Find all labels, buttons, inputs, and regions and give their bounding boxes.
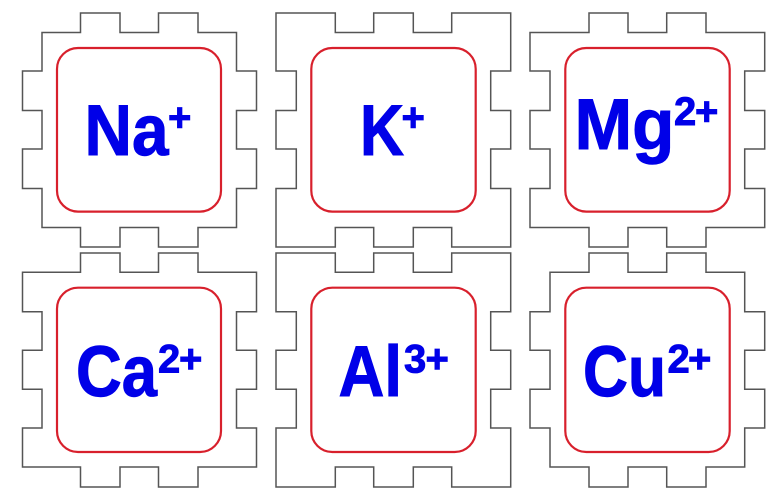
panel: Al3+ tile bbox=[276, 253, 511, 487]
ion label: Mg2+: 2 bbox=[674, 90, 696, 134]
red rounded frame: Na+ bbox=[57, 48, 221, 212]
puzzle outline: Cu2+ bbox=[530, 253, 765, 487]
red rounded frame: K+ bbox=[311, 48, 476, 212]
ion label: Cu2+: + bbox=[688, 338, 711, 382]
puzzle outline: Mg2+ bbox=[530, 13, 765, 247]
ion label: Cu2+: Cu bbox=[583, 332, 666, 412]
ion label: Cu2+: 2 bbox=[668, 338, 690, 382]
puzzle outline: Al3+ bbox=[276, 253, 511, 487]
ion label: Mg2+: + bbox=[695, 90, 718, 134]
panel: Mg2+ tile bbox=[530, 13, 765, 247]
puzzle outline: K+ bbox=[276, 13, 511, 247]
ion label: Mg2+: Mg bbox=[574, 85, 674, 165]
ion label: Al3+: 3 bbox=[404, 338, 426, 382]
ion label: Ca2+: + bbox=[179, 338, 202, 382]
ion label: Al3+ bbox=[338, 332, 449, 412]
ion label: Ca2+: 2 bbox=[158, 338, 180, 382]
ion label: Al3+: + bbox=[426, 338, 449, 382]
ion label: K+: + bbox=[402, 96, 425, 140]
ion label: Ca2+: Ca bbox=[76, 332, 158, 412]
ion label: Al3+: Al bbox=[338, 332, 402, 412]
ion label: Na+: + bbox=[168, 96, 191, 140]
panel: Cu2+ tile bbox=[530, 253, 765, 487]
red rounded frame: Ca2+ bbox=[57, 288, 221, 452]
puzzle outline: Ca2+ bbox=[22, 253, 256, 487]
ion label: Na+: Na bbox=[84, 91, 169, 171]
panel: Na+ tile bbox=[22, 13, 256, 247]
panel: K+ tile bbox=[276, 13, 511, 247]
red rounded frame: Al3+ bbox=[311, 288, 476, 452]
red rounded frame: Cu2+ bbox=[565, 288, 730, 452]
red rounded frame: Mg2+ bbox=[565, 48, 730, 212]
panel: Ca2+ tile bbox=[22, 253, 256, 487]
puzzle outline: Na+ bbox=[22, 13, 256, 247]
ion label: K+: K bbox=[360, 91, 404, 171]
